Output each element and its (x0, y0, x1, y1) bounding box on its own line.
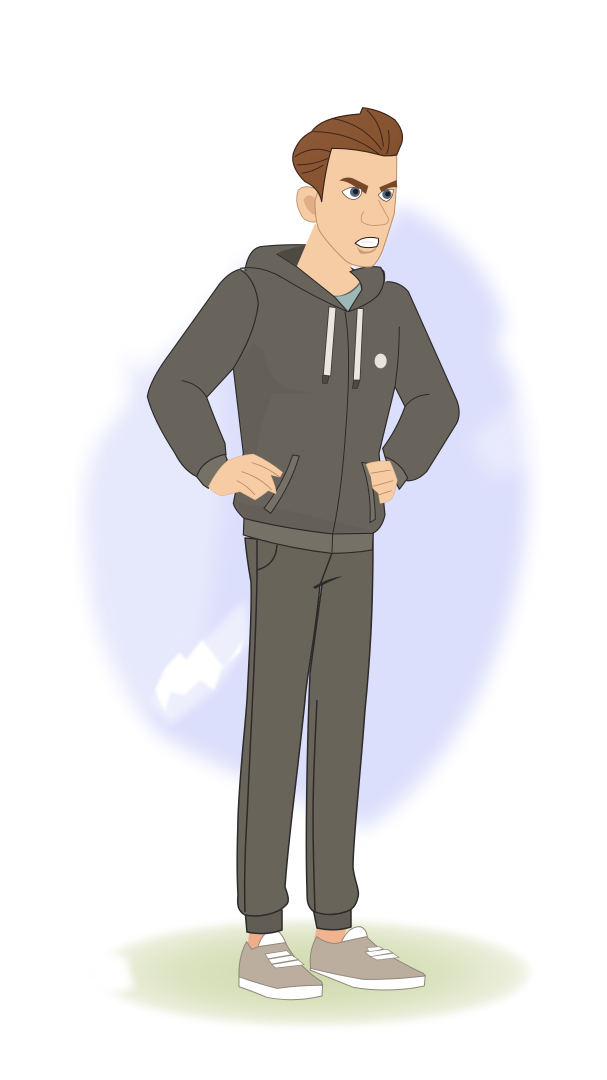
chest badge (375, 354, 387, 368)
neck (297, 223, 360, 297)
hood front flap: right (348, 267, 384, 312)
zipper (332, 312, 349, 553)
background: lavender watercolor blob (80, 205, 535, 828)
hoodie: hood back (245, 245, 385, 312)
trouser cuff: right (313, 908, 351, 930)
hoodie: sleeve right outline (383, 282, 459, 481)
ankle: left (248, 932, 265, 951)
drawstring: right (352, 308, 363, 388)
head (293, 108, 402, 267)
shoe laces: right (365, 947, 399, 960)
cuff: left (197, 454, 227, 488)
t-shirt collar (334, 283, 362, 312)
eye: left (342, 187, 362, 200)
pocket: left (264, 455, 299, 513)
hoodie: sleeve right (380, 282, 459, 481)
hair (293, 108, 402, 202)
hoodie: torso shading (234, 343, 370, 533)
drawstring: left (323, 307, 336, 383)
sleeve fold lines (182, 327, 429, 407)
trouser leg: left (237, 538, 335, 916)
hoodie: torso (233, 270, 398, 534)
eyebrow: right (379, 180, 397, 193)
ear (297, 187, 318, 222)
trouser leg: right (300, 533, 373, 915)
trousers (237, 533, 373, 934)
hood front flap: left outline (240, 254, 347, 312)
hoodie: torso outline (233, 368, 395, 534)
hand: left (208, 454, 283, 500)
face (315, 147, 397, 267)
hand: right (366, 461, 397, 503)
hoodie: sleeve left (147, 269, 258, 477)
trouser seams and creases (245, 540, 317, 912)
pocket: right (362, 462, 375, 523)
shoe: left (239, 930, 323, 1000)
crotch crease (313, 576, 343, 589)
hood front flap: left (240, 254, 347, 312)
hoodie and upper body (147, 223, 459, 553)
shoe: right (310, 927, 425, 990)
shoes (239, 927, 425, 1000)
hood interior shadow (277, 246, 312, 267)
shoe laces: left (265, 951, 304, 968)
nose (361, 200, 388, 225)
eyebrow: left (339, 177, 368, 194)
mouth (355, 237, 379, 254)
ankle: right (314, 928, 347, 945)
trouser cuff: left (245, 910, 282, 934)
hoodie: hem band (243, 518, 373, 553)
eye: right (378, 189, 393, 201)
cuff: right (385, 457, 408, 489)
ground: green grass patch (90, 920, 530, 1026)
